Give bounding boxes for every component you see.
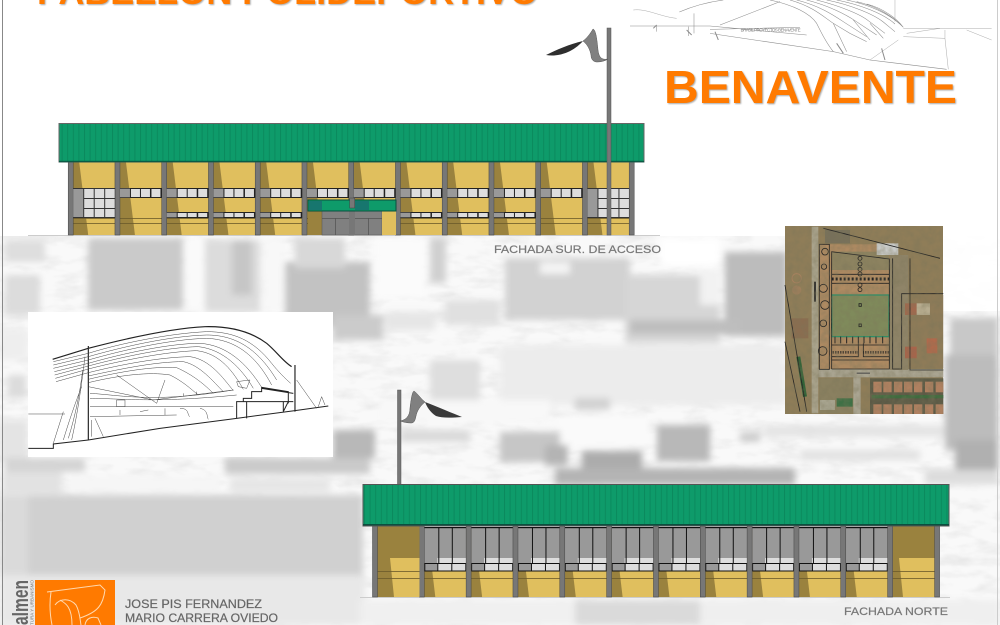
sketch: roof perspective (top right): BRASIL PROYECTOS BENAVENTE [741,28,801,33]
heading: Benavente: BENAVENTE [664,61,957,113]
author names: JOSE PIS FERNANDEZ [125,599,262,611]
building elevation: north facade [360,484,950,598]
logo: studio mark: TURA Y URBANISMO [30,580,34,625]
roof [59,124,644,162]
flag: north facade mast [398,390,462,485]
sketch: roof perspective (top right) [630,0,992,69]
end bay left [372,526,420,597]
entrance doors [308,211,396,235]
end bay right [888,526,940,597]
logo: studio mark [8,580,115,625]
author names: MARIO CARRERA OVIEDO [125,613,278,625]
aerial site plan [785,226,943,414]
building elevation: south facade [28,124,660,236]
sketch panel: interior section [28,312,333,457]
caption: south facade: FACHADA SUR. DE ACCESO [494,244,661,256]
flag: south facade mast [546,28,611,235]
logo: studio mark: almen [8,580,33,625]
roof [363,484,949,526]
author names [125,599,278,625]
caption: north facade: FACHADA NORTE [844,606,948,618]
entrance canopy [308,200,396,211]
